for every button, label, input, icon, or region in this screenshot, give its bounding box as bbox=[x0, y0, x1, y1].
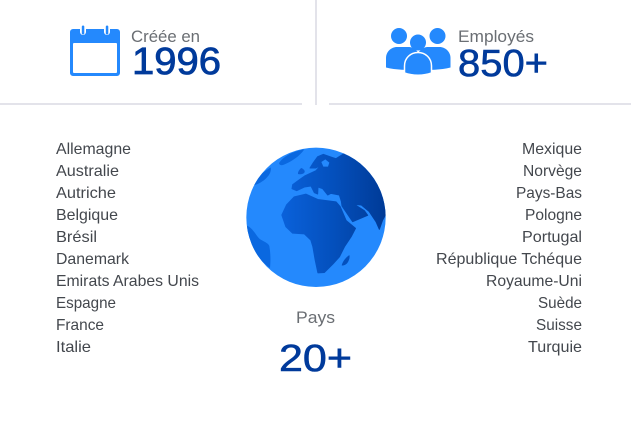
label: employees: Employés bbox=[458, 27, 534, 46]
label: founded: Créée en bbox=[131, 27, 200, 46]
value: 1996: 1996 bbox=[132, 41, 221, 83]
list: countries right: Royaume-Uni bbox=[486, 273, 582, 290]
list: countries left: France bbox=[56, 317, 104, 334]
list: countries left: Emirats Arabes Unis bbox=[56, 273, 199, 290]
list: countries right: Pologne bbox=[525, 207, 582, 224]
uk bbox=[298, 168, 305, 174]
greenland bbox=[279, 149, 304, 165]
list: countries left bbox=[56, 141, 199, 356]
north america top bbox=[253, 167, 271, 185]
list: countries right: Suède bbox=[538, 295, 582, 312]
south america bbox=[246, 225, 270, 268]
list: countries right: Norvège bbox=[523, 163, 582, 180]
list: countries left: Australie bbox=[56, 163, 119, 180]
list: countries right: Suisse bbox=[536, 317, 582, 334]
list: countries left: Italie bbox=[56, 339, 91, 356]
label: countries: Pays bbox=[296, 308, 335, 327]
icon: calendar bbox=[70, 26, 120, 76]
list: countries right: Mexique bbox=[522, 141, 582, 158]
list: countries left: Allemagne bbox=[56, 141, 131, 158]
list: countries right: Pays-Bas bbox=[516, 185, 582, 202]
icon: people bbox=[386, 28, 450, 75]
africa bbox=[282, 194, 355, 273]
list: countries left: Belgique bbox=[56, 207, 118, 224]
panel: employees bbox=[386, 27, 548, 85]
list: countries right bbox=[436, 141, 582, 356]
value: 850+: 850+ bbox=[458, 43, 548, 85]
madagascar bbox=[342, 255, 350, 265]
panel: founded year bbox=[70, 26, 221, 83]
icon: globe bbox=[246, 148, 386, 287]
value: 20+: 20+ bbox=[279, 338, 352, 380]
list: countries left: Espagne bbox=[56, 295, 116, 312]
list: countries left: Brésil bbox=[56, 229, 97, 246]
list: countries right: Portugal bbox=[522, 229, 582, 246]
eurasia bbox=[292, 154, 386, 230]
baltic sea bbox=[321, 159, 329, 167]
list: countries right: République Tchéque bbox=[436, 251, 582, 268]
list: countries left: Danemark bbox=[56, 251, 130, 268]
list: countries right: Turquie bbox=[528, 339, 582, 356]
list: countries left: Autriche bbox=[56, 185, 116, 202]
